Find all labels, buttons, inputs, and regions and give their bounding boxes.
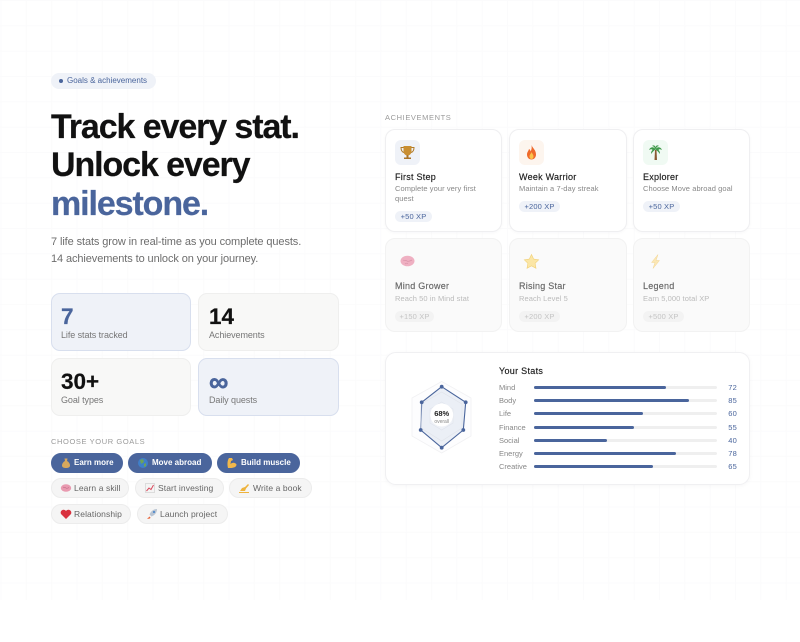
stat: achievements — [198, 293, 339, 351]
stat: life stats tracked — [51, 293, 191, 351]
stat: daily quests: ∞ — [209, 367, 228, 397]
achievement: first step: quest — [395, 194, 414, 203]
bar chart: stats: Creative — [499, 462, 527, 471]
bar chart: stats: 72 — [728, 383, 737, 392]
bar chart: stats: Energy — [499, 449, 523, 458]
achievement: week warrior: Week Warrior — [519, 172, 577, 182]
bar chart: stats: 65 — [728, 462, 737, 471]
achievement: first step — [385, 129, 502, 232]
stat: goal types: 30+ — [61, 369, 99, 394]
panel: stat cards — [51, 293, 339, 416]
title: Unlock every — [51, 146, 249, 184]
achievement: mind grower: +150 XP — [399, 312, 430, 321]
achievement: legend: +500 XP — [648, 312, 679, 321]
badge: goals and achievements: Goals & achievements — [67, 76, 147, 85]
achievement: explorer: Choose Move abroad goal — [643, 184, 733, 193]
bar chart: stats: 60 — [728, 409, 737, 418]
achievement: mind grower — [385, 238, 502, 332]
achievement: week warrior: +200 XP — [524, 202, 555, 211]
achievement: first step: +50 XP — [401, 212, 426, 221]
icon: fire — [519, 140, 544, 165]
stat: life stats tracked: Life stats tracked — [61, 330, 128, 340]
achievement: legend: Legend — [643, 281, 675, 291]
bar chart: stats: 85 — [728, 396, 737, 405]
chip: earn more: Earn more — [74, 458, 114, 467]
stat: goal types — [51, 358, 191, 416]
chip: launch project — [137, 504, 228, 524]
chip: build muscle — [217, 453, 300, 473]
chip: move abroad — [128, 453, 212, 473]
achievement: week warrior: Maintain a 7-day streak — [519, 184, 599, 193]
achievement: first step: Complete your very first — [395, 184, 476, 193]
achievement: explorer: Explorer — [643, 172, 679, 182]
icon: lightning bolt — [651, 254, 660, 268]
chip: relationship: Relationship — [74, 509, 122, 519]
achievement: legend: Earn 5,000 total XP — [643, 294, 709, 302]
bar chart: stats: Social — [499, 436, 519, 445]
achievement: legend — [633, 238, 750, 332]
chip: relationship — [51, 504, 131, 524]
achievement: rising star: +200 XP — [524, 312, 555, 321]
badge: goals and achievements — [51, 73, 156, 89]
radar chart — [412, 381, 472, 454]
achievement: rising star — [509, 238, 627, 332]
stat: goal types: Goal types — [61, 395, 103, 405]
icon: brain — [400, 256, 414, 266]
panel: achievements grid — [385, 129, 750, 332]
bar chart: stats: Mind — [499, 383, 515, 392]
bar chart: stats: 40 — [728, 436, 737, 445]
achievement: first step: First Step — [395, 172, 436, 182]
stat: daily quests: Daily quests — [209, 395, 257, 405]
radar chart: 68% — [434, 409, 450, 418]
stat: achievements: 14 — [209, 304, 234, 329]
stat: achievements: Achievements — [209, 330, 265, 340]
achievement: rising star: Rising Star — [519, 281, 566, 291]
chip: write a book — [229, 478, 312, 498]
chip: move abroad: Move abroad — [152, 458, 201, 467]
bar chart: stats — [499, 383, 737, 471]
chip: earn more — [51, 453, 123, 473]
achievement: explorer: +50 XP — [649, 202, 674, 211]
achievement: mind grower: Mind Grower — [395, 281, 449, 291]
achievement: week warrior — [509, 129, 627, 232]
title — [51, 108, 299, 223]
chip: build muscle: Build muscle — [241, 458, 291, 467]
icon: palm tree — [643, 140, 668, 165]
chip: learn a skill — [51, 478, 129, 498]
icon: star — [524, 254, 540, 269]
achievement: mind grower: Reach 50 in Mind stat — [395, 294, 469, 302]
chip: start investing: Start investing — [158, 483, 213, 493]
chip: start investing — [135, 478, 224, 498]
bar chart: stats: 55 — [728, 423, 737, 432]
text block: intro — [51, 236, 301, 265]
stat: life stats tracked: 7 — [61, 304, 74, 329]
text block: intro: 14 achievements to unlock on your journey. — [51, 253, 258, 265]
chip: write a book: Write a book — [253, 483, 302, 493]
heading: achievements: ACHIEVEMENTS — [385, 113, 451, 122]
radar chart: overall — [434, 419, 449, 425]
heading: choose your goals: CHOOSE YOUR GOALS — [51, 437, 145, 446]
bar chart: stats: 78 — [728, 449, 737, 458]
title: milestone. — [51, 185, 208, 223]
achievement: explorer — [633, 129, 750, 232]
text block: intro: 7 life stats grow in real-time as you complete quests. — [51, 236, 301, 248]
achievement: rising star: Reach Level 5 — [519, 294, 568, 302]
panel: goal chips — [51, 453, 312, 524]
chip: learn a skill: Learn a skill — [74, 483, 121, 493]
title: Track every stat. — [51, 108, 299, 146]
bar chart: stats: Life — [499, 409, 511, 418]
bar chart: stats: Body — [499, 396, 516, 405]
bar chart: stats: Finance — [499, 423, 526, 432]
panel: your stats — [385, 352, 750, 485]
stat: daily quests — [198, 358, 339, 416]
icon: trophy — [395, 140, 420, 165]
heading: your stats: Your Stats — [499, 366, 543, 376]
chip: launch project: Launch project — [160, 509, 217, 519]
